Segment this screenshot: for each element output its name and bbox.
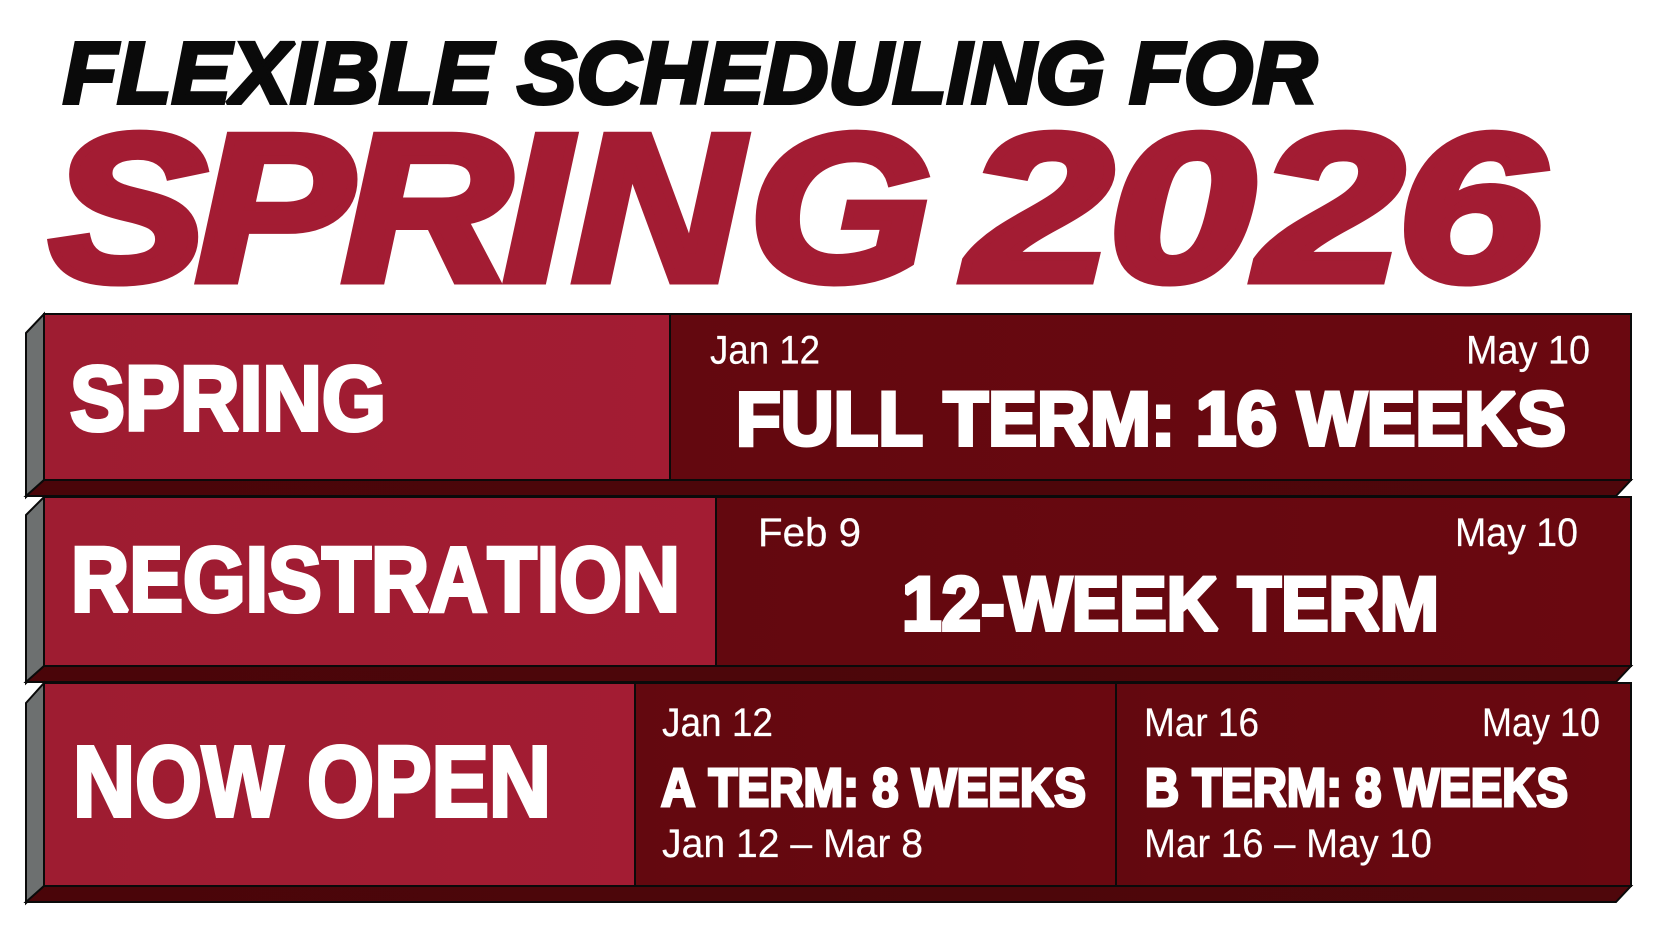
panel: registration row	[26, 497, 1631, 683]
row bottom face	[26, 666, 1631, 682]
row side face	[26, 497, 44, 683]
term cell: 12-week term: May 10	[1455, 511, 1578, 555]
term cell: A term: Jan 12 – Mar 8	[662, 822, 923, 866]
term cell: B term: May 10	[1482, 701, 1600, 745]
term cell: A term	[635, 683, 1116, 886]
panel: spring row	[26, 314, 1631, 497]
term cell: B term: B TERM: 8 WEEKS	[1145, 758, 1568, 818]
term cell: full term: May 10	[1466, 328, 1590, 372]
label cell: spring: SPRING	[70, 348, 386, 450]
term cell: full term: Jan 12	[710, 328, 820, 372]
term cell: B term: Mar 16 – May 10	[1144, 822, 1432, 866]
term cell: A term: Jan 12	[662, 701, 773, 745]
row side face	[26, 683, 44, 903]
term cell: 12-week term: 12-WEEK TERM	[902, 562, 1439, 647]
term cell: 12-week term	[716, 497, 1631, 666]
term cell: A term: A TERM: 8 WEEKS	[661, 758, 1086, 818]
term cell: full term	[670, 314, 1631, 480]
term cell: B term	[1116, 683, 1631, 886]
label cell: registration	[44, 497, 716, 666]
row bottom face	[26, 480, 1631, 496]
label cell: registration: REGISTRATION	[71, 529, 680, 631]
panel: now open row	[26, 683, 1631, 903]
label cell: spring	[44, 314, 670, 480]
term cell: full term: FULL TERM: 16 WEEKS	[736, 377, 1566, 462]
row bottom face	[26, 886, 1631, 902]
heading: flexible scheduling for: FLEXIBLE SCHEDULING FOR	[63, 25, 1317, 122]
label cell: now open	[44, 683, 635, 886]
term cell: B term: Mar 16	[1144, 701, 1259, 745]
title: spring 2026	[50, 92, 1544, 325]
term cell: 12-week term: Feb 9	[758, 511, 861, 555]
row side face	[26, 314, 44, 497]
title: spring 2026: 2026	[963, 92, 1544, 325]
title: spring 2026: SPRING	[50, 92, 931, 325]
label cell: now open: NOW OPEN	[73, 726, 551, 838]
